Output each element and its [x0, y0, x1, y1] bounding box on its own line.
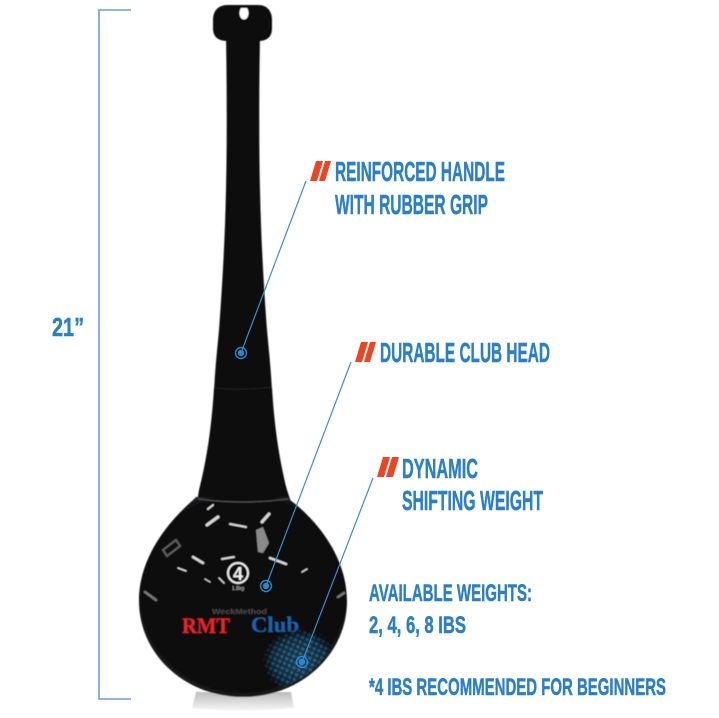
callout text: DYNAMIC: [402, 453, 478, 484]
height label: 21”: [52, 312, 84, 342]
callout text: REINFORCED HANDLE: [335, 156, 505, 187]
glass reflections: [145, 505, 344, 600]
club ball: [139, 497, 347, 697]
pointer line: [302, 478, 373, 662]
brand small text: WeckMethod: [212, 607, 267, 616]
shifting weight beads: [262, 628, 332, 688]
slash marks: [377, 457, 399, 477]
callout: dynamic shifting weight: [296, 453, 543, 668]
callout: durable club head: [260, 337, 550, 592]
weight badge: 4: [233, 564, 243, 584]
lanyard hole: [240, 8, 248, 20]
weight badge: 1.8kg: [232, 586, 244, 592]
callout text: WITH RUBBER GRIP: [335, 189, 488, 220]
upper glass band: [140, 501, 346, 596]
club handle: [214, 36, 272, 392]
Club label: Club: [251, 612, 299, 637]
club cap: [213, 5, 272, 41]
available weights text: [369, 580, 532, 639]
callout text: SHIFTING WEIGHT: [402, 485, 543, 516]
club product image: [139, 5, 347, 710]
callout text: [402, 453, 543, 516]
joint line: [214, 387, 272, 389]
callout: reinforced handle: [236, 156, 505, 358]
RMT label: RMT: [182, 613, 230, 638]
dimension bracket: [52, 10, 131, 699]
slash marks: [355, 342, 376, 362]
pointer dot: [260, 580, 272, 592]
collar edge: [198, 499, 288, 502]
pointer line: [241, 181, 306, 353]
pointer dot: [296, 656, 308, 668]
callout text: DURABLE CLUB HEAD: [380, 337, 550, 368]
club shadow: [192, 692, 294, 710]
pointer line: [266, 362, 351, 586]
pointer dot: [236, 348, 246, 358]
slash marks: [310, 161, 331, 181]
weight badge: [228, 563, 248, 592]
callout text: [335, 156, 505, 220]
available weights text: AVAILABLE WEIGHTS:: [369, 580, 532, 607]
available weights text: 2, 4, 6, 8 IBS: [369, 612, 466, 639]
club neck: [197, 388, 291, 502]
